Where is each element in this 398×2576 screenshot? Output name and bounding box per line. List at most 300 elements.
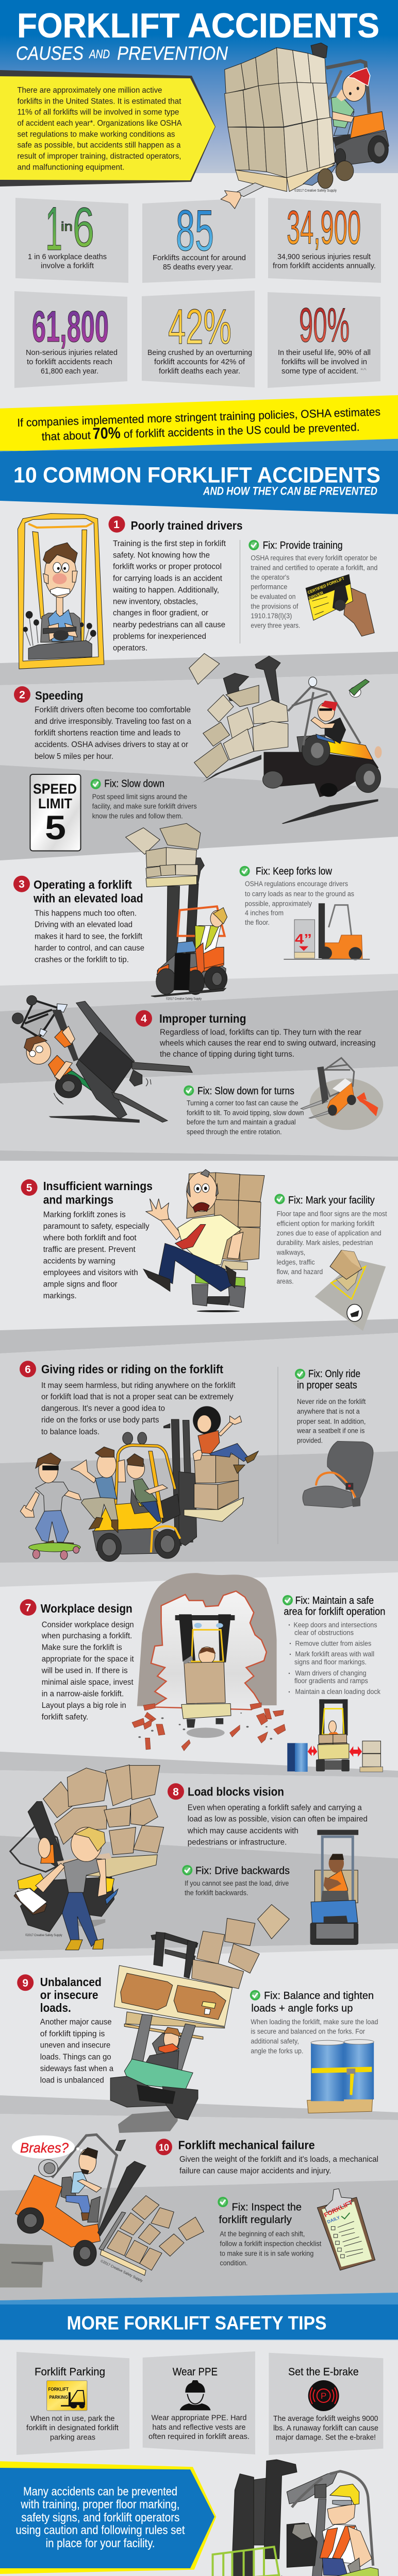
fix block: additional safety,: [251, 2038, 299, 2045]
body text: employees and visitors with: [43, 1268, 138, 1277]
fix block: [250, 1990, 378, 2113]
panel: 5 insufficient warnings: [21, 1170, 387, 1331]
yellow stat banner: that about: [41, 429, 91, 443]
yellow stat banner: If companies implemented more stringent training policies, OSHA estimates: [17, 405, 380, 429]
tip cards: [16, 2351, 383, 2455]
fix block: [283, 1595, 385, 1772]
fix block: performance: [251, 583, 287, 591]
icon: strapped blue drums on pallet: [307, 2040, 374, 2113]
heading: Workplace design: [41, 1602, 132, 1615]
heading: Operating a forklift: [34, 878, 132, 891]
stat card: 85: Forklifts account for around: [153, 253, 246, 262]
fix block: know the rules and follow them.: [92, 812, 183, 820]
fix block: OSHA requires that every forklift operator be: [251, 554, 377, 562]
icon: forklift seat with orange seatbelt: [303, 1441, 373, 1508]
fix block: Fix: Inspect the: [232, 2202, 302, 2213]
section heading: 10 common forklift accidents: [13, 463, 380, 498]
body text: Consider workplace design: [42, 1620, 134, 1629]
closing callout arrow: [0, 2461, 217, 2574]
intro text: safe as possible, but accidents still happen as a: [18, 141, 181, 150]
closing text: with training, proper floor marking,: [21, 2498, 179, 2511]
illustration: forklift load blocking view, near-miss pedestrian: [10, 1765, 164, 1950]
illustration: forklift with elevated load: [126, 823, 227, 997]
body text: [35, 706, 191, 761]
body text: forklift safety.: [42, 1713, 88, 1721]
fix block: the provisions of: [251, 602, 299, 610]
body text: uneven and insecure: [40, 2041, 110, 2050]
tip card: set the e-brake: major damage. Set the e-brake!: [276, 2433, 376, 2442]
stat card: 90%: *^: [360, 367, 367, 374]
body text: Layout plays a big role in: [42, 1701, 126, 1710]
illustration: people riding on forklift: [20, 1406, 258, 1562]
closing text: [15, 2484, 185, 2550]
heading: with an elevated load: [33, 892, 143, 905]
number badge 7: 7: [25, 1602, 31, 1614]
icon: forklift parking sign: [47, 2381, 87, 2411]
intro callout arrow: [0, 70, 215, 187]
icon: speed limit 5 sign: SPEED: [33, 781, 77, 797]
body text: [40, 2018, 113, 2085]
stat card: 85: 85: [176, 198, 214, 263]
fix block: Post speed limit signs around the: [92, 793, 187, 801]
body text: Another major cause: [40, 2018, 112, 2026]
tip card: forklift parking: parking areas: [50, 2433, 95, 2442]
fix block: durability. Mark aisles, pedestrian: [277, 1239, 373, 1247]
fix block: ledges, traffic: [277, 1258, 315, 1266]
closing text: safety signs, and forklift operators: [21, 2511, 179, 2524]
fix block: Fix: Drive backwards: [195, 1866, 290, 1877]
body text: wheels which causes the rear end to swing outward, increasing: [159, 1039, 375, 1047]
icon: forklift with safe clearance arrows: [287, 1699, 383, 1772]
fix block: to make sure it is in safe working: [220, 2249, 313, 2257]
fix block: Fix: Only ride: [308, 1368, 360, 1380]
fix block: proper seat. In addition,: [297, 1417, 366, 1425]
fix block: Fix: Slow down: [104, 778, 164, 790]
body text: for carrying loads is an accident: [113, 574, 223, 583]
subtitle: causes and prevention: AND: [88, 47, 110, 61]
body text: pedestrians or infrastructure.: [188, 1838, 287, 1847]
body text: [41, 1381, 236, 1436]
fix block: every three years.: [251, 622, 300, 630]
fix block: anywhere that is not a: [297, 1408, 360, 1415]
body text: appropriate for the space it: [42, 1655, 134, 1664]
tip card: set the e-brake: Set the E-brake: [288, 2366, 359, 2378]
body text: minimal aisle space, invest: [42, 1678, 134, 1687]
fix block: 1910.178(l)(3): [251, 612, 292, 620]
tip card: set the e-brake: lbs. A runaway forklift can cause: [273, 2424, 378, 2432]
body text: which may cause accidents with: [187, 1826, 299, 1835]
body text: [112, 539, 226, 653]
body text: markings.: [43, 1292, 77, 1300]
body text: [159, 1028, 375, 1059]
body text: loads. Things can go: [40, 2053, 111, 2061]
heading: Insufficient warnings: [43, 1179, 153, 1193]
tip card: forklift parking: [16, 2352, 129, 2455]
bullet list: Keep doors and intersections: [294, 1621, 377, 1629]
stat card: 42%: forklift accounts for 42% of: [154, 358, 245, 366]
number badge 3: [13, 876, 30, 892]
icon: speed limit 5 sign: 5: [45, 808, 66, 846]
body text: of forklift tipping is: [40, 2029, 105, 2038]
intro text: and malfunctioning equipment.: [18, 163, 125, 172]
number badge 5: 5: [26, 1182, 32, 1194]
tip card: wear PPE: Wear PPE: [173, 2366, 218, 2378]
fix block: Fix: Keep forks low: [256, 866, 332, 877]
number badge 5: [21, 1179, 38, 1196]
stat card: 42%: 42%: [168, 299, 231, 354]
tip card: wear PPE: [143, 2351, 255, 2454]
number badge 1: 1: [113, 519, 120, 531]
fix block: [295, 1368, 373, 1508]
body text: to balance loads.: [41, 1428, 100, 1436]
stat card: 34,900: 34,900 serious injuries result: [277, 252, 371, 261]
tip card: wear PPE: often required in forklift areas.: [148, 2432, 250, 2441]
stat card: 61,800: 61,800 each year.: [41, 367, 98, 376]
fix block: Turning a corner too fast can cause the: [187, 1099, 299, 1107]
fix block: [182, 1830, 358, 1945]
body text: [179, 2155, 378, 2175]
body text: Driving with an elevated load: [35, 920, 132, 929]
intro text: 11% of all forklifts will be involved in some type: [18, 108, 179, 117]
number badge 9: 9: [22, 1977, 28, 1989]
number badge 7: [20, 1599, 37, 1616]
fix block: possible, approximately: [245, 900, 312, 907]
fix block: Never ride on the forklift: [297, 1398, 366, 1405]
panel: 4 improper turning: [12, 995, 383, 1136]
yellow stat banner: [0, 395, 398, 452]
yellow stat banner: 70%: [92, 423, 121, 443]
body text: accidents. OSHA advises drivers to stay at or: [35, 740, 188, 749]
illustration: speeding forklift with flying boxes: [189, 653, 382, 824]
body text: nearby pedestrians can all cause: [113, 620, 225, 629]
body text: waiting to happen. Additionally,: [112, 586, 219, 595]
stat card: 85: 85 deaths every year.: [163, 263, 233, 272]
panel: 1 poorly trained drivers: [18, 514, 377, 669]
body text: new inventory, obstacles,: [113, 598, 198, 606]
stat card: 1 in 6: 1 in 6 workplace deaths: [28, 252, 107, 261]
fix block: [91, 778, 197, 820]
section heading: more forklift safety tips: MORE FORKLIFT SAFETY TIPS: [67, 2313, 327, 2334]
body text: forklift shortens reaction time and leads to: [35, 729, 180, 738]
body text: crashes or the forklift to tip.: [35, 956, 129, 964]
body text: [35, 909, 144, 964]
body text: [41, 1620, 134, 1721]
body text: below 5 miles per hour.: [35, 752, 113, 761]
tip card: wear PPE: hats and reflective vests are: [153, 2423, 245, 2432]
panel: 2 speeding: [14, 653, 382, 851]
stat card: 1 in 6: 1: [45, 194, 62, 263]
fix block: Fix: Mark your facility: [288, 1195, 375, 1206]
icon: speed limit 5 sign: [30, 774, 80, 851]
fix block: forklift to tilt. To avoid tipping, slow down: [187, 1109, 304, 1116]
intro text: There are approximately one million active: [18, 86, 162, 95]
subtitle: causes and prevention: [16, 43, 228, 64]
number badge 2: 2: [19, 689, 25, 701]
copyright: speeding: ©2017 Creative Safety Supply: [311, 802, 355, 818]
icon: forklift parking sign: PARKING: [49, 2395, 68, 2400]
illustration: forklift tipping with unbalanced load: [110, 1905, 289, 2133]
fix block: areas.: [277, 1278, 294, 1285]
illustration: forklift rolling off a ledge: [0, 2134, 204, 2287]
heading: loads.: [40, 2001, 71, 2014]
icon: forklift turning slowly with arrow: [301, 1058, 383, 1130]
number badge 8: [168, 1783, 184, 1800]
body text: or forklift load that is not a proper seat can be extremely: [41, 1393, 234, 1401]
body text: Regardless of load, forklifts can tip. They turn with the rear: [160, 1028, 361, 1037]
body text: Marking forklift zones is: [43, 1210, 126, 1219]
fix block: facility, and make sure forklift drivers: [92, 803, 197, 810]
body text: ride on the forks or use body parts: [41, 1416, 159, 1425]
number badge 3: 3: [19, 878, 25, 890]
body text: paramount to safety, especially: [43, 1222, 150, 1231]
tip card: forklift parking: Forklift Parking: [35, 2366, 105, 2378]
body text: operators.: [113, 644, 147, 653]
hero illustration: driver crushing worker under boxes: [221, 43, 389, 209]
fix block: [248, 540, 377, 636]
closing text: Many accidents can be prevented: [23, 2484, 177, 2498]
bullet list: floor gradients and ramps: [294, 1677, 368, 1685]
fix block: before the turn and maintain a gradual: [187, 1118, 296, 1126]
tip card: forklift parking: forklift in designated forklift: [26, 2424, 119, 2432]
body text: Make sure the forklift is: [42, 1643, 122, 1652]
body text: Even when operating a forklift safely and carrying a: [188, 1803, 362, 1812]
stat card: 1 in 6: 6: [73, 196, 94, 258]
subtitle: causes and prevention: PREVENTION: [117, 43, 228, 64]
fix block: zones due to ease of application and: [277, 1229, 382, 1237]
intro text: result of improper training, distracted operators,: [18, 152, 181, 161]
body text: ample signs and floor: [43, 1280, 118, 1289]
fix block: is secure and balanced on the forks. For: [251, 2028, 365, 2036]
icon: forklift parking sign: FORKLIFT: [48, 2387, 69, 2393]
icon: forklift with fork height 4 inches: 4”: [295, 931, 312, 947]
body text: and drive irresponsibly. Traveling too fast on a: [35, 717, 191, 726]
fix block: provided.: [297, 1437, 323, 1445]
illustration: startled man on forklift: [143, 1170, 264, 1312]
heading: and markings: [43, 1193, 113, 1207]
fix block: loads + angle forks up: [251, 2003, 353, 2014]
fix block: the operator's: [251, 573, 290, 581]
heading: [43, 1179, 153, 1207]
icon: certified driver card in hand: [306, 574, 374, 636]
heading: Load blocks vision: [188, 1785, 284, 1799]
stat card: 85: [142, 198, 255, 283]
fix block: area for forklift operation: [284, 1606, 385, 1617]
fix block: to carry loads as near to the ground as: [245, 890, 354, 897]
body text: [187, 1803, 368, 1847]
copyright: mechanical failure: ©2017 Creative Safety Supply: [100, 2259, 143, 2283]
body text: Forklift drivers often become too comfortable: [35, 706, 191, 715]
fix block: At the beginning of each shift,: [220, 2230, 305, 2238]
copyright: hero: ©2017 Creative Safety Supply: [294, 188, 337, 193]
number badge 10: [156, 2139, 172, 2155]
body text: dangerous. It's never a good idea to: [41, 1404, 165, 1413]
stat card: 1 in 6: in: [61, 219, 73, 234]
body text: This happens much too often.: [35, 909, 137, 918]
body text: in a narrow-aisle forklift.: [42, 1689, 124, 1698]
fix block: Fix: Provide training: [263, 540, 343, 551]
icon: forklift inspection clipboard: DAILY: [326, 2215, 341, 2225]
body text: [43, 1210, 150, 1300]
panel: 10 mechanical failure: [0, 2134, 378, 2287]
icon: forklift with fork height 4 inches: [284, 903, 370, 960]
fix block: Fix: Maintain a safe: [295, 1595, 374, 1606]
subtitle: causes and prevention: CAUSES: [16, 43, 84, 64]
bullet list: Warn drivers of changing: [295, 1669, 366, 1677]
icon: floor marked pallet zone with sign: [314, 1250, 386, 1331]
body text: traffic are present. Prevent: [43, 1245, 136, 1254]
fix block: speed through the entire rotation.: [187, 1128, 282, 1136]
stat card: 61,800: to forklift accidents reach: [27, 358, 112, 366]
stat card: 42%: [142, 291, 255, 387]
number badge 8: 8: [173, 1786, 179, 1798]
icon: forklift inspection clipboard: FORKLIFT: [323, 2199, 354, 2219]
icon: forklift inspection clipboard: [317, 2189, 375, 2270]
stat card: 90%: [268, 292, 380, 388]
fix block: Floor tape and floor signs are the most: [277, 1210, 387, 1218]
heading: Speeding: [35, 689, 84, 702]
fix block: [218, 2189, 375, 2270]
stat card: 90%: forklifts will be involved in: [281, 358, 367, 366]
stat card: 61,800: 61,800: [32, 302, 109, 351]
body text: safety. Not knowing how the: [113, 551, 210, 560]
heading: Unbalanced: [40, 1975, 102, 1989]
number badge 9: [17, 1974, 34, 1991]
fix block: angle the forks up.: [251, 2047, 303, 2055]
icon: certified driver card in hand: CERTIFIED FORKLIFT: [307, 576, 345, 595]
tip card: set the e-brake: [269, 2353, 383, 2455]
fix block: in proper seats: [297, 1380, 357, 1391]
fix block: [240, 866, 370, 960]
fix block: Fix: Balance and tighten: [264, 1990, 374, 2002]
number badge 4: [136, 1010, 152, 1027]
illustration: tipping forklift: [12, 995, 192, 1123]
bullet list: Remove clutter from aisles: [295, 1639, 371, 1647]
fix block: be evaluated on: [251, 593, 295, 601]
intro text: [18, 86, 182, 172]
fix block: OSHA regulations encourage drivers: [245, 880, 348, 888]
fix block: condition.: [220, 2259, 247, 2267]
fix block: Fix: Slow down for turns: [197, 1086, 294, 1097]
intro text: set regulations to make working conditions as: [18, 130, 175, 139]
fix block: flow, and hazard: [277, 1268, 323, 1276]
icon: speed limit 5 sign: LIMIT: [38, 795, 72, 811]
stat card: 61,800: Non-serious injuries related: [26, 348, 118, 357]
body text: where both forklift and foot: [43, 1233, 137, 1242]
body text: load is unbalanced: [40, 2076, 104, 2085]
icon: parking brake warning light: [308, 2380, 339, 2411]
stat card: 90%: In their useful life, 90% of all: [278, 348, 371, 357]
header title: [16, 6, 379, 64]
fix block: efficient option for marking forklift: [277, 1219, 374, 1227]
illustration: safe forklift operator: [124, 2460, 388, 2576]
thought bubble: brakes?: [12, 2136, 82, 2159]
body text: It may seem harmless, but riding anywhere on the forklift: [41, 1381, 236, 1390]
body text: Training is the first step in forklift: [113, 539, 226, 548]
heading: Giving rides or riding on the forklift: [41, 1363, 223, 1376]
heading: [40, 1975, 102, 2014]
section heading: 10 common forklift accidents: 10 COMMON FORKLIFT ACCIDENTS: [13, 463, 380, 488]
tip card: set the e-brake: The average forklift weighs 9000: [273, 2414, 378, 2423]
fix block: If you cannot see past the load, drive: [185, 1879, 289, 1887]
bullet list: [289, 1621, 380, 1696]
fix block: walkways,: [276, 1249, 305, 1257]
body text: Given the weight of the forklift and it's loads, a mechanical: [179, 2155, 378, 2164]
body text: load as low as possible, vision can often be impaired: [188, 1815, 368, 1824]
tip card: forklift parking: When not in use, park the: [30, 2414, 114, 2423]
body text: changes in floor gradient, or: [113, 609, 208, 618]
heading: Forklift mechanical failure: [178, 2139, 315, 2152]
stat card: 34,900: from forklift accidents annually.: [273, 262, 376, 270]
stat card: 1 in 6: [15, 194, 128, 283]
icon: certified driver card in hand: DRIVER: [308, 590, 324, 601]
number badge 1: [108, 516, 125, 533]
bullet list: signs and floor markings.: [294, 1658, 367, 1666]
panel: 9 unbalanced loads: [17, 1905, 378, 2133]
tip card: wear PPE: Wear appropriate PPE. Hard: [152, 2414, 246, 2422]
body text: accidents by warning: [43, 1257, 115, 1266]
fix block: the forklift backwards.: [185, 1889, 248, 1897]
closing text: using caution and following rules set: [15, 2523, 185, 2537]
stat card: 42%: Being crushed by an overturning: [147, 348, 252, 357]
closing text: in place for your facility.: [46, 2536, 155, 2550]
icon: forklift driven backwards: [310, 1830, 358, 1945]
bullet list: clear of obstructions: [294, 1629, 354, 1636]
heading: Poorly trained drivers: [131, 519, 243, 532]
body text: sideways fast when a: [40, 2064, 113, 2073]
divider: [277, 1367, 278, 1544]
body text: forklift works or proper protocol: [113, 563, 222, 571]
number badge 6: [20, 1361, 36, 1377]
fix block: follow a forklift inspection checklist: [220, 2240, 322, 2247]
copyright: elevated load: ©2017 Creative Safety Supply: [166, 997, 202, 1001]
fix block: forklift regularly: [219, 2214, 292, 2226]
stat card: 61,800: [14, 291, 127, 388]
stat card: 42%: forklift deaths each year.: [159, 367, 240, 376]
panel: 3 elevated load: [13, 823, 370, 1001]
fix block: [274, 1194, 387, 1331]
fix block: 4 inches from: [245, 909, 284, 917]
panel: 6 giving rides: [20, 1361, 373, 1562]
intro text: forklifts in the United States. It is estimated that: [18, 97, 181, 106]
stat cards: [14, 194, 381, 388]
fix block: trained and certified to operate a forklift, and: [251, 564, 377, 571]
copyright: load blocks vision: ©2017 Creative Safety Supply: [25, 1934, 62, 1937]
yellow stat banner: of forklift accidents in the US could be prevented.: [123, 420, 360, 440]
heading: or insecure: [40, 1988, 98, 2002]
body text: makes it hard to see, the forklift: [35, 933, 143, 941]
bullet list: Mark forklift areas with wall: [295, 1650, 374, 1658]
illustration: forklift crashing through brick wall: [132, 1573, 286, 1751]
number badge 4: 4: [141, 1013, 147, 1025]
body text: harder to control, and can cause: [35, 944, 144, 953]
fix block: When loading the forklift, make sure the load: [251, 2018, 378, 2026]
number badge 6: 6: [25, 1364, 31, 1376]
thought bubble: brakes?: Brakes?: [20, 2140, 69, 2156]
body text: failure can cause major accidents and injury.: [179, 2166, 331, 2175]
bullet list: Maintain a clean loading dock: [295, 1688, 380, 1696]
fix block: the floor.: [245, 919, 270, 926]
body text: when purchasing a forklift.: [41, 1632, 132, 1640]
panel: 7 workplace design: [20, 1573, 385, 1772]
illustration: nervous driver in yellow cab: [18, 514, 104, 669]
heading: Improper turning: [159, 1012, 246, 1025]
stat card: 34,900: [268, 198, 381, 283]
number badge 10: 10: [159, 2142, 169, 2153]
icon: parking brake warning light: P: [321, 2391, 326, 2401]
body text: will be used in. If there is: [41, 1666, 128, 1675]
icon: worker with hard hat: [180, 2380, 211, 2410]
panel: 8 load blocks vision: [10, 1765, 368, 1950]
